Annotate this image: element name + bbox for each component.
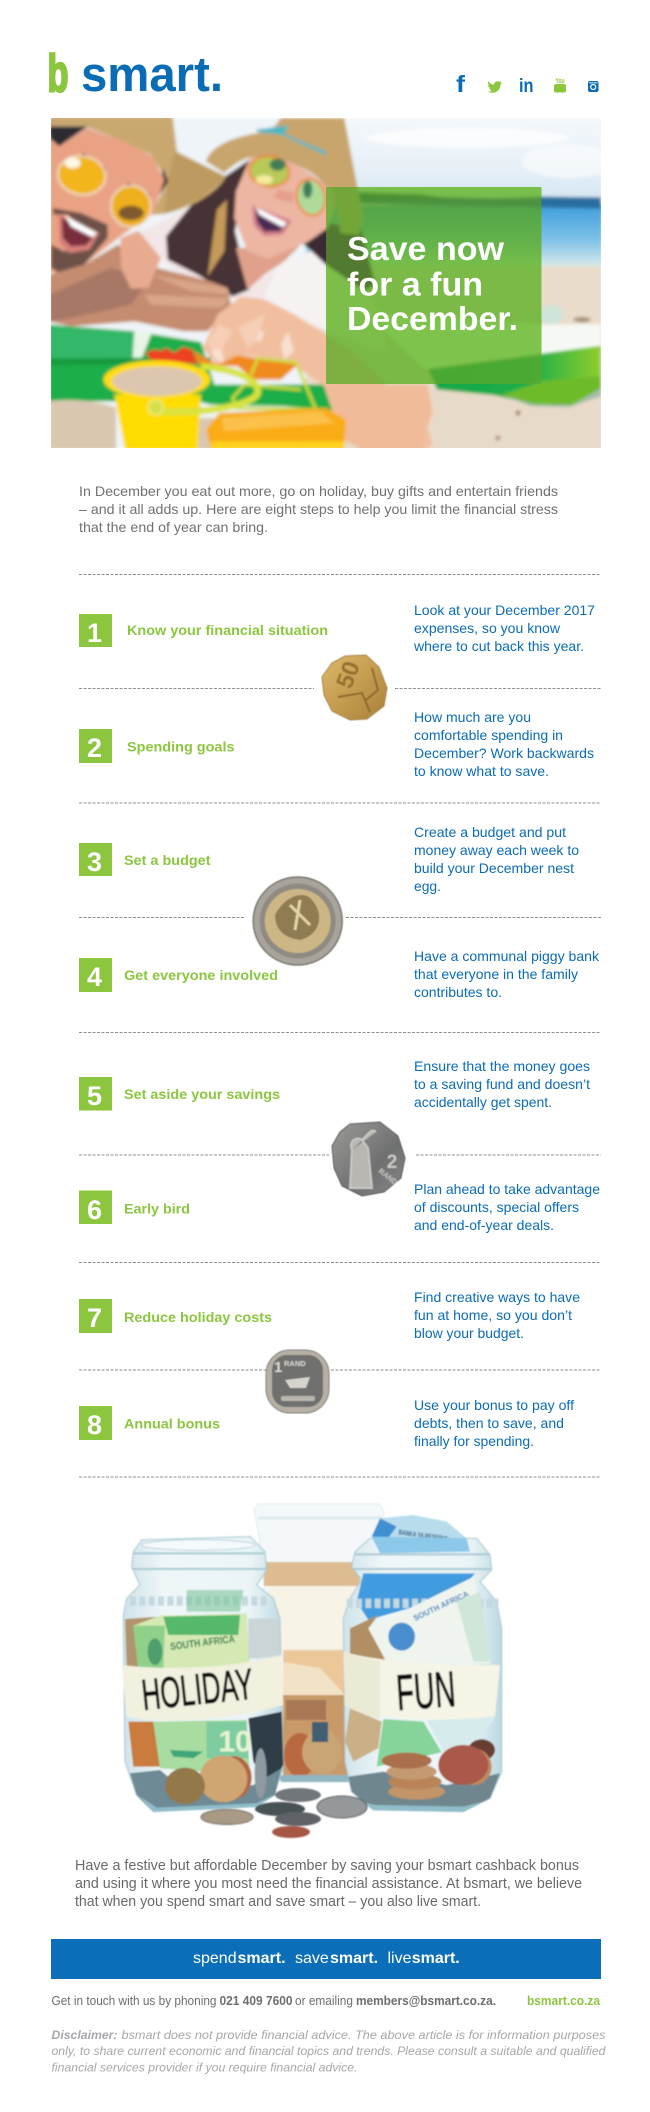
social icons: [456, 71, 598, 97]
step 5 description: [414, 1058, 590, 1110]
woman's neck: [236, 246, 299, 290]
disclaimer: Disclaimer:: [52, 2028, 118, 2042]
lower notes: [345, 1708, 382, 1762]
step 7 heading: Reduce holiday costs: [124, 1309, 272, 1325]
orange box: [206, 408, 346, 450]
step 6 description: Plan ahead to take advantage: [414, 1181, 600, 1197]
woman's hair: [166, 156, 254, 296]
step 5 heading: Set aside your savings: [124, 1086, 280, 1102]
step 6 heading: Early bird: [124, 1200, 190, 1216]
step 4: [79, 948, 600, 1000]
woman's hand on shoulder: [120, 231, 161, 289]
lime frame: [233, 359, 316, 410]
contact line: or emailing: [295, 1994, 353, 2008]
photo: savings jars: [122, 1504, 502, 1838]
step 5 description: to a saving fund and doesn’t: [414, 1076, 590, 1092]
step 2 description: to know what to save.: [414, 763, 549, 779]
hero text box: [326, 187, 542, 384]
number badge 1: 1: [87, 618, 102, 648]
woman's face: [234, 157, 338, 259]
green float: [49, 325, 344, 411]
step 2 heading: Spending goals: [127, 738, 235, 754]
holiday jar: [122, 1537, 283, 1812]
step 1 description: Look at your December 2017: [414, 602, 595, 618]
ribbed shoulder: [130, 1587, 270, 1615]
contact line: Get in touch with us by phoning: [52, 1994, 217, 2008]
step 5 description: Ensure that the money goes: [414, 1058, 590, 1074]
closing paragraph: that when you spend smart and save smart – you also live smart.: [75, 1894, 481, 1910]
contact line: members@bsmart.co.za.: [356, 1994, 496, 2008]
closing paragraph: [75, 1858, 582, 1910]
tagline bar: smart.: [412, 1950, 460, 1967]
fun jar: FUN: [395, 1661, 457, 1721]
step 2 description: How much are you: [414, 709, 531, 725]
sand left: [49, 400, 116, 450]
woman's hat: [206, 118, 363, 235]
number badge 6: [79, 1190, 112, 1225]
man's sunglasses: [55, 153, 108, 198]
step 8 description: debts, then to save, and: [414, 1415, 564, 1431]
icon: instagram: [588, 81, 598, 92]
icon: 1 rand coin: RAND: [284, 1359, 306, 1368]
step 3 description: [414, 824, 579, 894]
loose coins: [201, 1788, 367, 1838]
number badge 8: [79, 1406, 112, 1440]
step 7 description: [414, 1289, 580, 1341]
step 2: [79, 709, 594, 779]
base: [348, 1772, 500, 1812]
woman's sunglasses: [247, 154, 291, 189]
step 2 description: [414, 709, 594, 779]
blue note: [357, 1573, 475, 1620]
disclaimer: [52, 2028, 606, 2074]
closing paragraph: Have a festive but affordable December by saving your bsmart cashback bonus: [75, 1858, 579, 1874]
number badge 3: [79, 843, 112, 877]
tan note: [350, 1615, 387, 1663]
man's hair: [51, 124, 88, 148]
icon: 2 rand coin: RAND: [377, 1166, 400, 1187]
number badge 7: [79, 1299, 112, 1333]
step 6 description: and end-of-year deals.: [414, 1217, 554, 1233]
number badge 2: [79, 729, 112, 763]
holiday jar: HOLIDAY: [139, 1661, 255, 1720]
step 7: [79, 1289, 580, 1341]
step 7 description: fun at home, so you don’t: [414, 1307, 572, 1323]
step 7 description: blow your budget.: [414, 1325, 524, 1341]
contact line: [52, 1994, 601, 2008]
step 3: [79, 824, 579, 894]
icon: 50c coin: [322, 655, 387, 720]
step 3 description: egg.: [414, 878, 441, 894]
man's face: [49, 128, 164, 276]
orange shadow under hand: [194, 351, 298, 380]
back jar: [254, 1504, 384, 1782]
contact line: 021 409 7600: [220, 1994, 293, 2008]
man's mouth: [58, 215, 99, 253]
step 4 description: contributes to.: [414, 984, 502, 1000]
woman's nose shade: [274, 190, 294, 203]
headline: December.: [347, 301, 518, 338]
icon: facebook: f: [456, 71, 465, 97]
icon: 5 rand coin: [253, 877, 342, 965]
icon: 1 rand coin: [266, 1350, 329, 1413]
tagline bar: spend: [193, 1950, 237, 1967]
disclaimer: only, to share current economic and financial topics and trends. Please consult a suitable and qualified: [52, 2044, 606, 2058]
icon: youtube: [554, 78, 566, 92]
step 4 description: that everyone in the family: [414, 966, 578, 982]
intro paragraph: [79, 483, 558, 535]
green overlay panel: [326, 187, 542, 384]
fun jar: [343, 1515, 502, 1812]
icon: 2 rand coin: 2: [387, 1152, 397, 1173]
disclaimer: financial services provider if you require financial advice.: [52, 2060, 358, 2074]
headline: Save now: [347, 231, 505, 268]
beach background: [306, 118, 616, 451]
number badge 4: [79, 958, 112, 992]
woman's mouth: [252, 205, 292, 236]
holiday jar: 10: [218, 1726, 252, 1759]
base: [130, 1768, 282, 1812]
number badge 1: [79, 614, 112, 648]
white note: [368, 1577, 491, 1663]
number badge 2: 2: [87, 733, 102, 763]
step 8 description: [414, 1397, 574, 1449]
number badge 3: 3: [87, 847, 102, 877]
coins: [215, 1756, 252, 1799]
number badge 6: 6: [87, 1195, 102, 1225]
step 2 description: December? Work backwards: [414, 745, 594, 761]
notes below label: [128, 1722, 160, 1767]
step 6 description: [414, 1181, 600, 1233]
headline: [347, 231, 518, 338]
man's hat: [49, 116, 226, 215]
disclaimer: bsmart does not provide financial advice. The above article is for information purposes: [122, 2028, 606, 2042]
icon: linkedin: in: [519, 76, 534, 97]
step 4 description: [414, 948, 600, 1000]
step 8 heading: Annual bonus: [124, 1416, 220, 1432]
coins: [468, 1739, 495, 1761]
step 8 description: finally for spending.: [414, 1433, 534, 1449]
step 3 description: build your December nest: [414, 860, 574, 876]
headline: for a fun: [347, 266, 483, 304]
step 1: [79, 602, 595, 654]
logo: bsmart: smart.: [81, 48, 223, 102]
step 5 description: accidentally get spent.: [414, 1094, 552, 1110]
man's stubble: [51, 208, 108, 275]
red rake: [145, 347, 197, 364]
hero photo: couple on the beach: [49, 116, 616, 460]
tagline bar: smart.: [330, 1950, 378, 1967]
step 4 heading: Get everyone involved: [124, 967, 278, 983]
number badge 8: 8: [87, 1410, 102, 1440]
step 5: [79, 1058, 590, 1111]
number badge 7: 7: [87, 1303, 102, 1333]
step 3 description: money away each week to: [414, 842, 579, 858]
step 8: [79, 1397, 574, 1449]
closing paragraph: and using it where you most need the financial assistance. At bsmart, we believe: [75, 1876, 582, 1892]
notes above label: [125, 1617, 160, 1668]
icon: youtube: You: [556, 78, 564, 85]
fun jar: BANKA YA RESERVE: [398, 1529, 449, 1543]
step 1 description: [413, 602, 595, 654]
fun jar: SOUTH AFRICA: [412, 1589, 470, 1623]
tagline bar: [51, 1939, 601, 1979]
step 4 description: Have a communal piggy bank: [414, 948, 600, 964]
intro paragraph: – and it all adds up. Here are eight steps to help you limit the financial stress: [79, 501, 558, 517]
icon: 2 rand coin: [332, 1122, 405, 1196]
front hand: [203, 296, 433, 460]
step 2 description: comfortable spending in: [414, 727, 563, 743]
icon: twitter: [488, 81, 502, 93]
icon: 1 rand coin: 1: [274, 1359, 282, 1376]
step 1 description: where to cut back this year.: [413, 638, 584, 654]
label: [343, 1652, 500, 1720]
yellow bucket: [114, 395, 201, 450]
tagline bar: save: [295, 1950, 329, 1967]
website link: bsmart.co.za: [527, 1994, 601, 2008]
tagline bar: smart.: [238, 1950, 286, 1967]
label: [122, 1655, 283, 1720]
logo: bsmart: b: [48, 45, 68, 103]
intro paragraph: In December you eat out more, go on holiday, buy gifts and entertain friends: [79, 483, 558, 499]
intro paragraph: that the end of year can bring.: [79, 519, 268, 535]
number badge 5: [79, 1077, 112, 1111]
step 1 description: expenses, so you know: [414, 620, 561, 636]
number badge 4: 4: [87, 962, 102, 992]
step 1 heading: Know your financial situation: [127, 622, 328, 638]
number badge 5: 5: [87, 1081, 102, 1111]
icon: 50c coin: 50: [331, 658, 366, 692]
step 6 description: of discounts, special offers: [414, 1199, 579, 1215]
man's arm and hand: [49, 245, 231, 331]
step 6: [79, 1181, 600, 1233]
holiday jar: SOUTH AFRICA: [170, 1634, 236, 1653]
step 8 description: Use your bonus to pay off: [414, 1397, 574, 1413]
tagline bar: live: [388, 1950, 412, 1967]
step 3 description: Create a budget and put: [414, 824, 566, 840]
step 7 description: Find creative ways to have: [414, 1289, 580, 1305]
woman's shirt: [141, 210, 318, 328]
step 3 heading: Set a budget: [124, 852, 211, 868]
